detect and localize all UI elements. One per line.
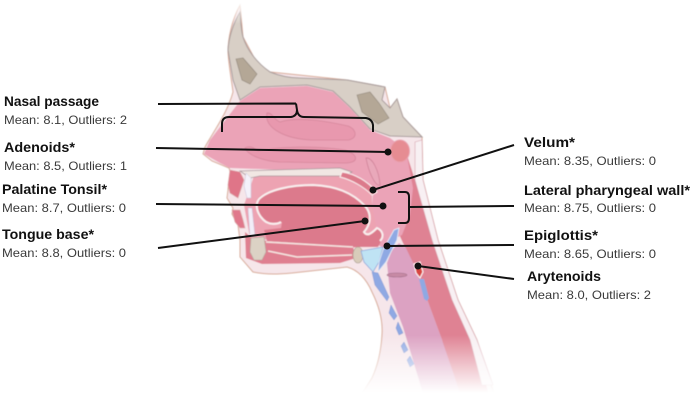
vocal fold [387, 273, 407, 277]
back of neck tissue [398, 152, 490, 400]
tongue outline [257, 185, 383, 241]
label: arytenoids: Arytenoids [527, 268, 601, 284]
label: epiglottis: Epiglottis* [524, 227, 599, 243]
label: nasal passage [4, 93, 127, 127]
label: palatine tonsil: Mean: 8.7, Outliers: 0 [2, 201, 126, 215]
bottom fade [340, 335, 510, 403]
trachea and larynx [387, 243, 462, 400]
tongue [257, 185, 384, 247]
label: velum [524, 134, 656, 168]
label: velum: Mean: 8.35, Outliers: 0 [524, 154, 656, 168]
label: adenoids: Adenoids* [4, 139, 76, 155]
label: arytenoids [527, 268, 651, 302]
label: lateral pharyngeal wall: Lateral pharyngeal wall* [524, 182, 691, 198]
skin silhouette [203, 5, 496, 400]
nasal cavity and pharynx [204, 86, 413, 248]
top fade [225, 0, 255, 24]
arytenoid [414, 262, 423, 278]
white strip along spine [415, 140, 493, 385]
label: tongue base [2, 226, 126, 260]
line: epiglottis [384, 242, 514, 250]
frontal sinus [236, 58, 257, 84]
upper lip [228, 170, 244, 198]
line: palatine tonsil [156, 202, 386, 210]
lower teeth [248, 208, 255, 236]
anatomy illustration: head and neck cross-section [203, 5, 496, 400]
laryngeal cartilage chain [372, 272, 414, 367]
label: arytenoids: Mean: 8.0, Outliers: 2 [527, 288, 651, 302]
label: tongue base: Mean: 8.8, Outliers: 0 [2, 246, 126, 260]
line: nasal passage bracket [158, 104, 373, 132]
label: epiglottis: Mean: 8.65, Outliers: 0 [524, 247, 656, 261]
line: tongue base [158, 218, 368, 248]
lower turbinate [245, 147, 356, 163]
skull bone [228, 12, 422, 137]
posterior cartilage [419, 279, 429, 301]
upper turbinate [267, 113, 355, 140]
line: arytenoids [414, 262, 514, 279]
velum [340, 172, 377, 195]
line: lateral pharyngeal wall bracket [398, 192, 514, 223]
adenoids [390, 140, 410, 162]
sphenoid sinus [357, 92, 389, 124]
mouth cavity [244, 172, 380, 248]
label: tongue base: Tongue base* [2, 226, 95, 242]
line: adenoids [156, 148, 392, 156]
label: velum: Velum* [524, 134, 576, 150]
label: lateral pharyngeal wall: Mean: 8.75, Outliers: 0 [524, 201, 656, 215]
label: nasal passage: Mean: 8.1, Outliers: 2 [4, 113, 127, 127]
label: nasal passage: Nasal passage [4, 93, 99, 109]
lower lip [232, 210, 245, 228]
thyroid cartilage [361, 247, 383, 272]
label: adenoids: Mean: 8.5, Outliers: 1 [4, 159, 127, 173]
hard palate [240, 168, 352, 178]
tube opening [366, 158, 380, 185]
floor of mouth [245, 232, 356, 264]
epiglottis [378, 228, 399, 272]
label: palatine tonsil: Palatine Tonsil* [2, 181, 108, 197]
upper teeth [244, 173, 251, 198]
label: epiglottis [524, 227, 656, 261]
label: adenoids [4, 139, 127, 173]
line: velum [370, 145, 514, 194]
label: palatine tonsil [2, 181, 126, 215]
hyoid [353, 247, 363, 263]
label: lateral pharyngeal wall [524, 182, 691, 215]
mandible [250, 237, 266, 260]
